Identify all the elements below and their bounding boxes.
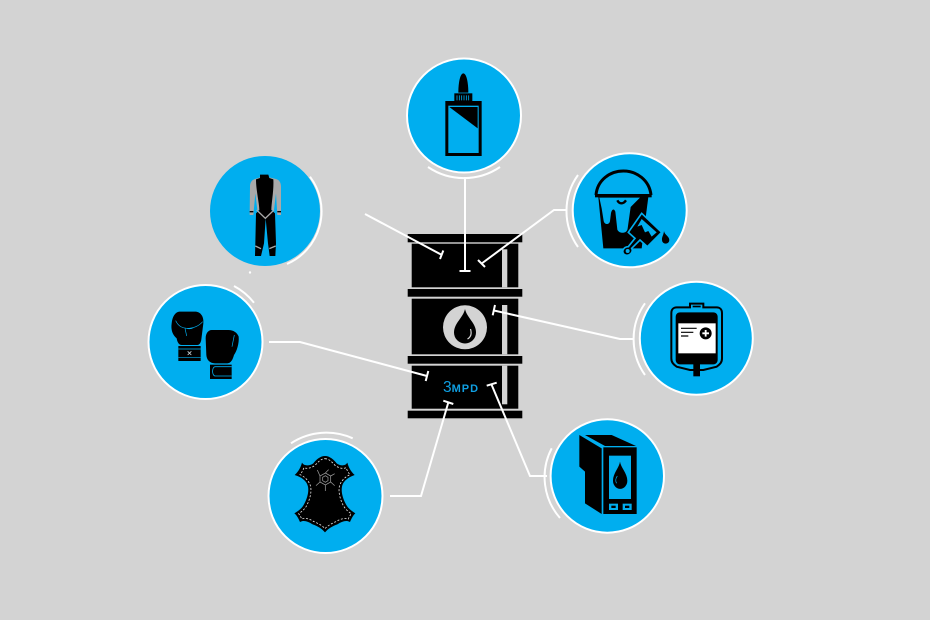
connector: blood bag to barrel [493,305,634,339]
node: leather hide [268,433,382,553]
node: blood bag [634,282,753,395]
node: boxing gloves [148,285,262,399]
connector: gloves to barrel [269,342,428,381]
icon: blood bag [671,304,722,376]
connector: leather to barrel [390,401,453,496]
connector: cartridge to barrel [487,383,547,476]
icon: leather hide [294,456,355,532]
node: wetsuit [210,156,322,274]
node: glue bottle [407,58,521,178]
icon: boxing gloves [171,312,239,379]
icon: ink cartridge [579,435,637,514]
connector: wetsuit to barrel [365,214,443,259]
icon: glue bottle [445,73,482,156]
node: paint bucket [566,153,687,267]
node: ink cartridge [545,419,664,533]
icon: wetsuit [250,175,281,256]
barrel label 3MPD: 3MPD [443,379,479,396]
connector: paint to barrel [478,210,567,267]
barrel oil drop badge [443,305,487,349]
connector: glue to barrel [460,177,470,271]
oil barrel [408,234,522,418]
icon: paint bucket and brush [595,171,669,255]
